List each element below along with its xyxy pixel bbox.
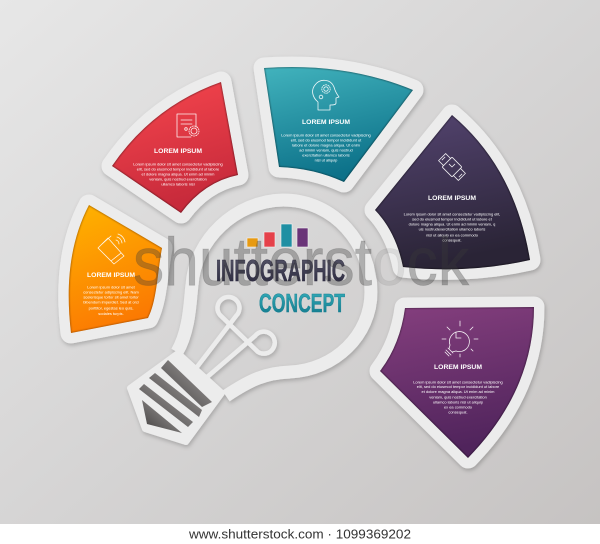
text block: teal: labore et dolore magna aliqua. Ut enim xyxy=(292,142,361,148)
text block: red xyxy=(133,162,223,186)
text block: teal: nisi ut aliquip xyxy=(315,158,338,162)
text block: orange: scelerisque tortor sit amet tortor xyxy=(83,294,139,300)
panel: teal xyxy=(264,67,413,182)
text block: plum: et dolore magna aliqua. Ut enim ad minim xyxy=(422,389,495,394)
icon: document with gear xyxy=(177,114,199,137)
heading: teal: LOREM IPSUM xyxy=(302,119,350,126)
mini bar chart xyxy=(247,224,308,247)
footer strip xyxy=(0,524,600,544)
heading: red: LOREM IPSUM xyxy=(154,148,202,155)
text block: orange: sodales turpis. xyxy=(98,311,124,316)
icon: phone with signal xyxy=(98,234,125,264)
heading: orange: LOREM IPSUM xyxy=(87,272,135,279)
text block: dark purple xyxy=(404,212,500,242)
text block: teal: Lorem ipsum dolor sit amet consectetur vadipiscing xyxy=(281,132,371,138)
text block: orange: bibendum imperdiet. Sed at orci xyxy=(83,300,139,304)
text block: teal: ad minim veniam, quis nostrud xyxy=(299,148,353,152)
text block: orange: porttitor, egestas leo quis, xyxy=(89,306,133,310)
text block: plum: veniam, quis nostrud exercitation xyxy=(429,394,487,400)
text block: orange: Lorem ipsum dolor sit amet xyxy=(87,284,136,290)
light bulb outline xyxy=(130,200,371,442)
panel: plum xyxy=(380,307,534,458)
text block: dark purple: uis nostrudexercitation ullamco laboris xyxy=(419,226,485,232)
text block: teal: exercitation ullamco laboris xyxy=(302,152,350,158)
text block: red: ullamco laboris nisi xyxy=(161,182,195,186)
watermark: shutterstock xyxy=(133,224,470,300)
text block: red: Lorem ipsum dolor sit amet consectetur vadipiscing xyxy=(133,162,223,166)
footer credit: www.shutterstock.com · 1099369202 xyxy=(188,526,411,542)
text block: dark purple: dolore magna aliqua. Ut enim ad minim veniam, q xyxy=(409,222,495,226)
panel: dark purple xyxy=(375,115,530,269)
heading: dark purple: LOREM IPSUM xyxy=(428,195,476,202)
text block: plum: Lorem ipsum dolor sit amet consectetur vadipiscing xyxy=(413,380,503,384)
text block: red: veniam, quis nostrud exercitation xyxy=(149,176,207,182)
text block: orange: consectetur adipiscing elit. Nam xyxy=(83,290,140,294)
text block: dark purple: consequat. xyxy=(442,238,462,242)
icon: head with gear xyxy=(313,80,339,110)
text block: teal: elit, sed do eiusmod tempor incididunt ut xyxy=(291,138,362,142)
text block: red: elit, sed do eiusmod tempor incididunt ut labore xyxy=(137,166,220,172)
text block: orange xyxy=(83,284,140,316)
icon: smart watch xyxy=(437,152,467,182)
title: concept: CONCEPT xyxy=(259,288,345,318)
text block: plum xyxy=(413,380,503,414)
text block: plum: ex ea commodo xyxy=(444,404,473,410)
panel: orange xyxy=(69,205,162,333)
text block: dark purple: Lorem ipsum dolor sit amet consectetur vadipiscing elit, xyxy=(404,212,500,216)
text block: dark purple: nisi ut aliquip ex ea commodo xyxy=(426,232,479,238)
text block: teal xyxy=(281,132,371,162)
text block: plum: consequat. xyxy=(448,410,468,414)
text block: dark purple: sed do eiusmod tempor incididunt ut labore et xyxy=(412,216,493,222)
text block: plum: elit, sed do eiusmod tempor incididunt ut labore xyxy=(417,384,500,389)
text block: plum: ullamco laboris nisi ut aliquip xyxy=(433,400,484,404)
text block: red: et dolore magna aliqua. Ut enim ad minim xyxy=(142,172,215,176)
icon: light bulb xyxy=(442,321,478,357)
panel: red xyxy=(112,82,238,213)
title: infographic: INFOGRAPHIC xyxy=(216,253,345,288)
heading: plum: LOREM IPSUM xyxy=(434,364,482,371)
bulb base stripes xyxy=(139,360,212,433)
